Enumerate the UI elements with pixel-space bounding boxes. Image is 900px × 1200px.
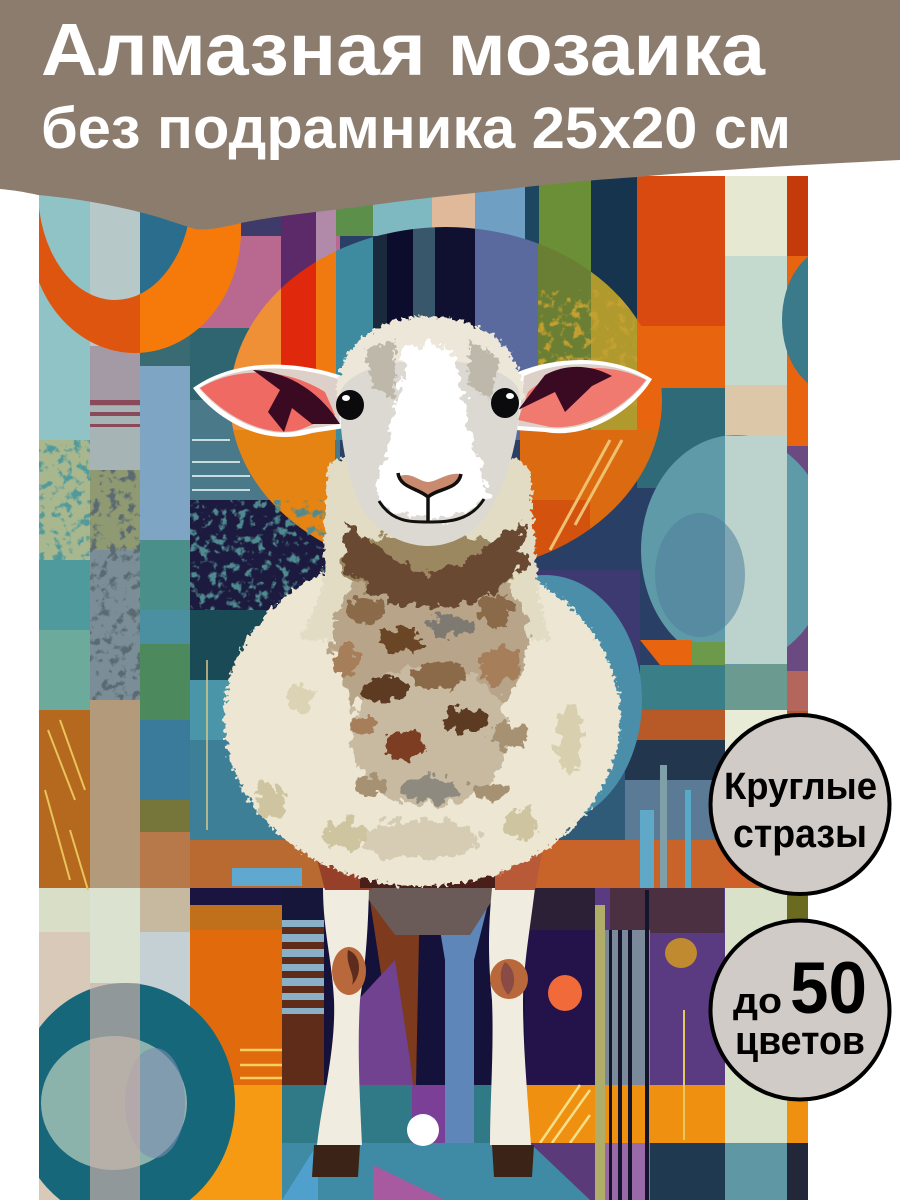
mouth <box>379 499 484 522</box>
right eye <box>491 388 519 418</box>
thin stripes lower right <box>595 890 685 1200</box>
left eye <box>336 390 364 420</box>
right circle pale overlay <box>725 436 787 664</box>
wool patches <box>365 340 500 400</box>
top vertical stripes <box>241 176 808 1200</box>
header banner <box>0 0 900 230</box>
right circle <box>641 435 808 665</box>
painting base <box>340 236 677 665</box>
small blue block <box>140 366 190 540</box>
pale lines panel <box>192 440 250 490</box>
right knee <box>490 959 528 999</box>
large teal circle bottom left <box>39 983 235 1200</box>
badge text: up to: до <box>733 980 782 1021</box>
left hoof <box>312 1145 360 1177</box>
right leg <box>489 888 535 1145</box>
right upper leg shadow <box>495 850 542 890</box>
left column details <box>39 400 207 830</box>
nose <box>398 473 461 522</box>
right ear <box>515 360 652 433</box>
orange dot <box>548 975 582 1011</box>
badge text: colours: цветов <box>735 1019 865 1063</box>
orange ring top left <box>39 208 241 353</box>
badge text line 1: Круглые <box>724 766 877 808</box>
title line 1: Алмазная мозаика <box>41 8 766 91</box>
right middle blocks <box>535 570 725 888</box>
sheep body wool <box>224 448 620 886</box>
sheep legs <box>312 850 542 1177</box>
badge: up to 50 colours <box>710 920 890 1100</box>
chest brown patches <box>256 520 584 860</box>
left upper leg shadow <box>317 860 372 890</box>
left knee <box>332 947 366 995</box>
badge text line 2: стразы <box>733 812 867 856</box>
left leg <box>317 888 369 1145</box>
left ear <box>193 365 345 437</box>
lower middle blocks <box>282 888 787 1200</box>
big orange sun shape <box>232 227 662 558</box>
right hoof <box>492 1145 534 1177</box>
orange hatch texture <box>45 720 88 890</box>
white blaze <box>375 345 490 521</box>
far right half circle <box>782 257 808 383</box>
right circle inner shade <box>655 513 745 637</box>
left column blocks <box>39 223 340 1200</box>
badge: round rhinestones <box>710 715 890 894</box>
dark grain overlay <box>190 500 340 610</box>
badge number 50: 50 <box>790 948 867 1029</box>
belly shadow <box>360 876 495 888</box>
golden dot <box>665 938 697 968</box>
head wool cap <box>337 316 524 400</box>
white ball <box>407 1114 439 1146</box>
title line 2: без подрамника 25х20 см <box>41 96 791 161</box>
painting: abstract sheep <box>39 176 808 1200</box>
gold stripes on orange block <box>240 1050 282 1078</box>
sheep face <box>336 340 519 546</box>
